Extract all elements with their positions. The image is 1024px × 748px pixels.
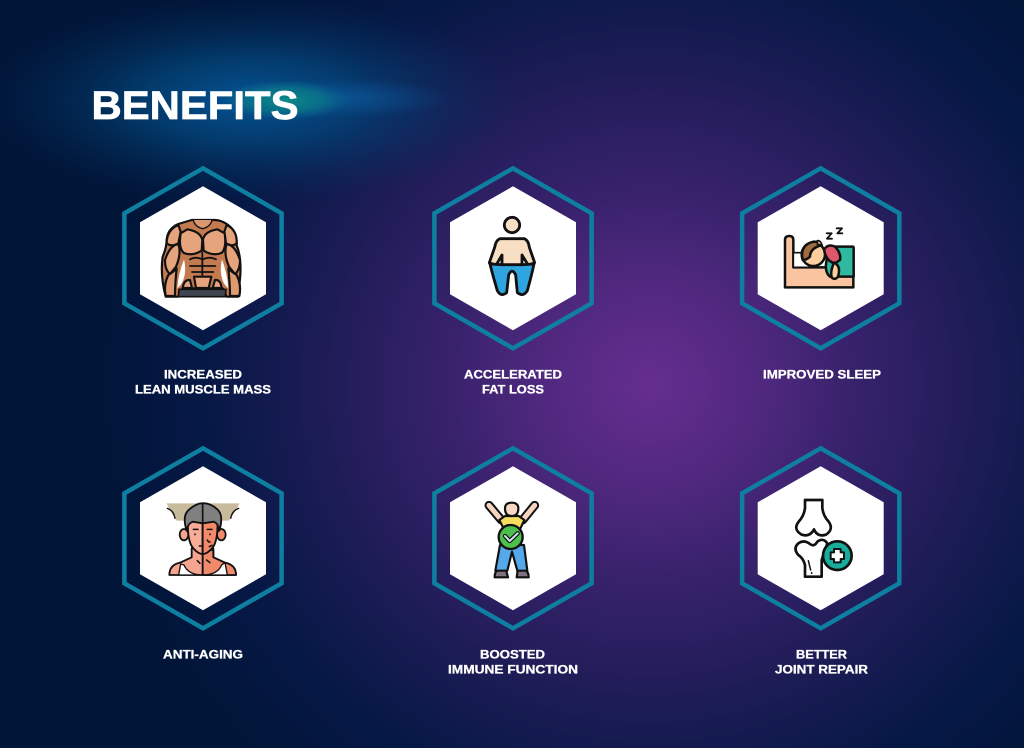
label: BOOSTED (480, 648, 545, 662)
hexagon frame (742, 448, 899, 628)
label: BETTER (796, 648, 847, 662)
label: ANTI-AGING (163, 648, 243, 662)
hexagon frame (124, 168, 282, 348)
icon: person with loose trousers (489, 217, 535, 295)
icon: muscular torso (162, 220, 241, 297)
panel: accelerated fat loss (434, 168, 592, 396)
panel: boosted immune function (434, 448, 592, 676)
hexagon frame (434, 448, 592, 628)
icon: knee joint with plus (795, 500, 852, 577)
label: JOINT REPAIR (775, 662, 868, 676)
panel: better joint repair (742, 448, 899, 676)
label: IMPROVED SLEEP (763, 368, 881, 382)
title: BENEFITS (92, 84, 298, 128)
icon: half young half aged face (167, 503, 239, 575)
label: LEAN MUSCLE MASS (135, 382, 271, 396)
hexagon frame (124, 448, 282, 628)
panel: improved sleep (742, 168, 899, 382)
label: ACCELERATED (464, 368, 562, 382)
hexagon frame (742, 168, 899, 348)
icon: healthy person with check mark (489, 503, 535, 577)
label (135, 368, 271, 396)
label: IMMUNE FUNCTION (448, 662, 578, 676)
label: INCREASED (164, 368, 242, 382)
label (464, 368, 562, 396)
panel: increased lean muscle mass (124, 168, 282, 396)
label (775, 648, 868, 676)
label: FAT LOSS (482, 382, 544, 396)
hexagon frame (434, 168, 592, 348)
icon: person sleeping in bed (785, 228, 854, 287)
label (448, 648, 578, 676)
panel: anti-aging (124, 448, 282, 662)
